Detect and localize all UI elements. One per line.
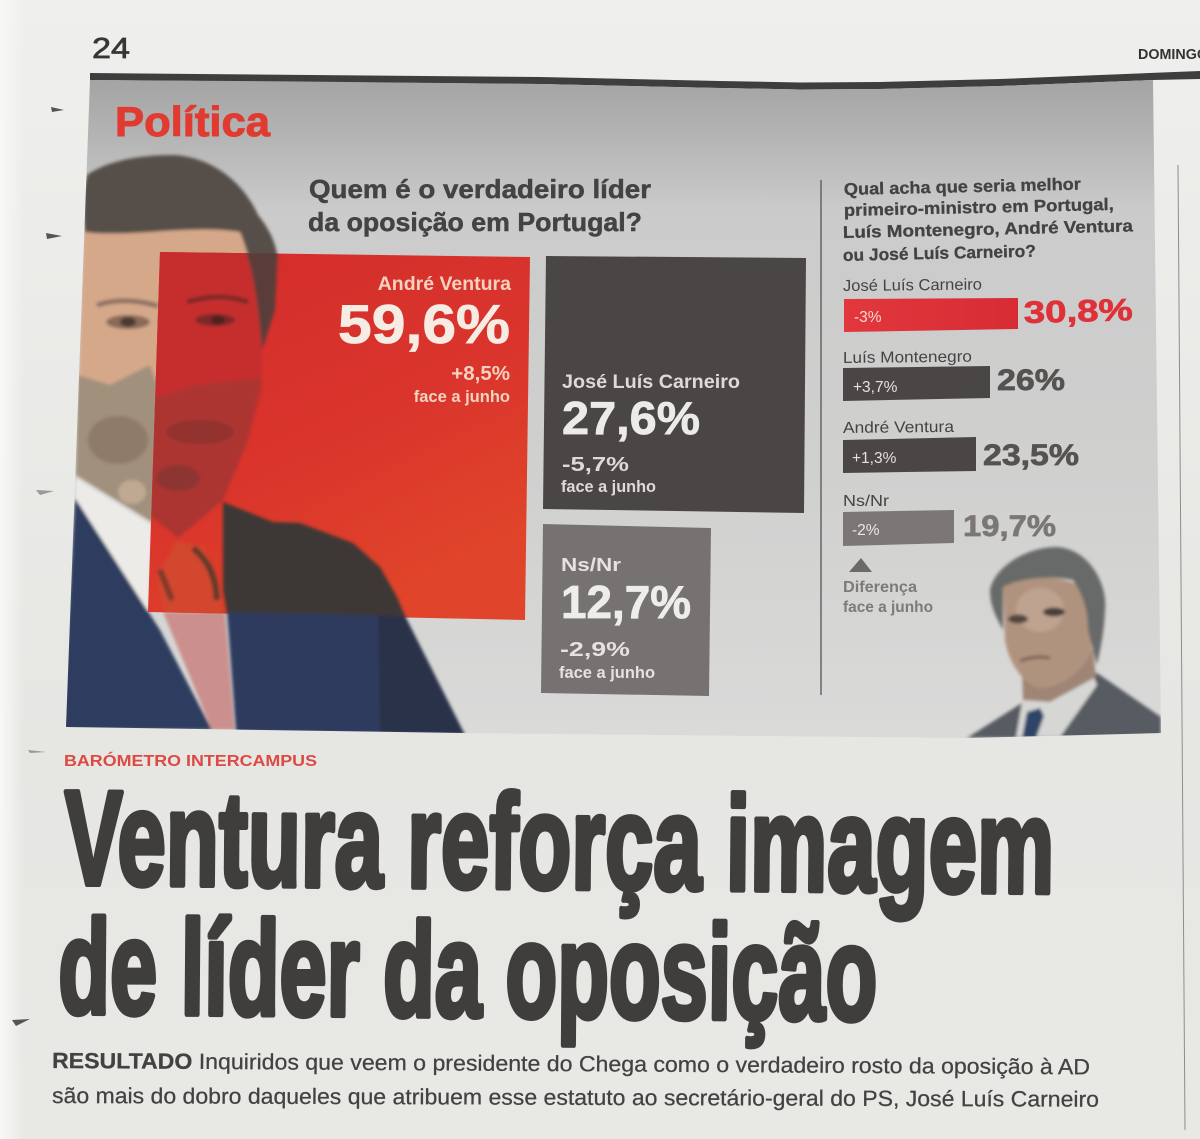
box: José Luís Carneiro 27,6%: [543, 256, 806, 513]
standfirst: são mais do dobro daqueles que atribuem esse estatuto ao secretário-geral do PS, José Luís Carneiro: [52, 1083, 1099, 1112]
heading: second question: [843, 175, 1134, 265]
change: -5,7%: -5,7%: [562, 453, 629, 476]
heading: main question: Quem é o verdadeiro líder: [309, 174, 651, 204]
bar: José Luís Carneiro: José Luís Carneiro: [843, 277, 982, 295]
standfirst: [52, 1048, 1099, 1112]
bar: André Ventura: [843, 419, 1079, 473]
legend: difference from June: [843, 558, 933, 616]
panel: poll graphic: [62, 80, 1161, 738]
divider: [820, 180, 822, 695]
bar: Luís Montenegro: 26%: [997, 364, 1065, 397]
box: Ns/Nr 12,7%: [541, 524, 711, 696]
change: +8,5%: +8,5%: [451, 362, 510, 385]
caption: face a junho: face a junho: [414, 388, 510, 406]
bar: André Ventura: André Ventura: [843, 419, 954, 437]
bar: Luís Montenegro: Luís Montenegro: [843, 349, 972, 367]
bar: José Luís Carneiro: -3%: [854, 309, 882, 326]
label: José Luís Carneiro: José Luís Carneiro: [562, 371, 740, 393]
value: 59,6%: 59,6%: [338, 293, 510, 355]
bar: Luís Montenegro: +3,7%: [853, 379, 898, 396]
page number: 24: [92, 33, 130, 65]
heading: second question: Qual acha que seria melhor: [844, 175, 1081, 199]
heading: second question: ou José Luís Carneiro?: [843, 242, 1036, 265]
standfirst: RESULTADO Inquiridos que veem o presidente do Chega como o verdadeiro rosto da oposição à AD: [52, 1048, 1090, 1079]
label: Ns/Nr: Ns/Nr: [561, 554, 621, 575]
bar: Luís Montenegro: [843, 349, 1065, 401]
headline: [58, 764, 1055, 1049]
label: André Ventura: André Ventura: [378, 273, 511, 295]
caption: face a junho: face a junho: [559, 664, 655, 682]
bar chart: preferred prime minister: [843, 277, 1133, 546]
heading: main question: [308, 174, 651, 237]
top rule: [90, 71, 1200, 90]
bar: André Ventura: 23,5%: [983, 439, 1079, 472]
photo: José Luís Carneiro: [967, 547, 1161, 738]
bar: Ns/Nr: Ns/Nr: [843, 493, 890, 510]
photo: André Ventura: [62, 155, 278, 730]
heading: second question: primeiro-ministro em Portugal,: [844, 195, 1114, 220]
panel background: [66, 80, 1161, 738]
bar: Ns/Nr: [843, 493, 1056, 546]
bar: André Ventura: +1,3%: [852, 450, 897, 467]
bar: Ns/Nr: 19,7%: [963, 510, 1056, 543]
heading: second question: Luís Montenegro, André Ventura: [843, 216, 1134, 242]
value: 27,6%: 27,6%: [562, 392, 700, 444]
legend: difference from June: Diferença: [843, 579, 917, 596]
caption: face a junho: face a junho: [561, 478, 656, 496]
photo: André Ventura suit over the red box: [223, 502, 465, 735]
heading: main question: da oposição em Portugal?: [308, 207, 642, 237]
legend: difference from June: face a junho: [843, 599, 933, 616]
section label: Política: Política: [115, 98, 271, 145]
value: 12,7%: 12,7%: [561, 576, 691, 628]
change: -2,9%: -2,9%: [560, 638, 630, 661]
bar: José Luís Carneiro: 30,8%: [1023, 292, 1133, 330]
box: André Ventura 59,6%: [148, 240, 530, 620]
bar: Ns/Nr: -2%: [852, 522, 880, 539]
portrait seen through the red box: [150, 240, 278, 615]
bar: José Luís Carneiro: [843, 277, 1133, 332]
kicker: BARÓMETRO INTERCAMPUS: [64, 751, 317, 770]
